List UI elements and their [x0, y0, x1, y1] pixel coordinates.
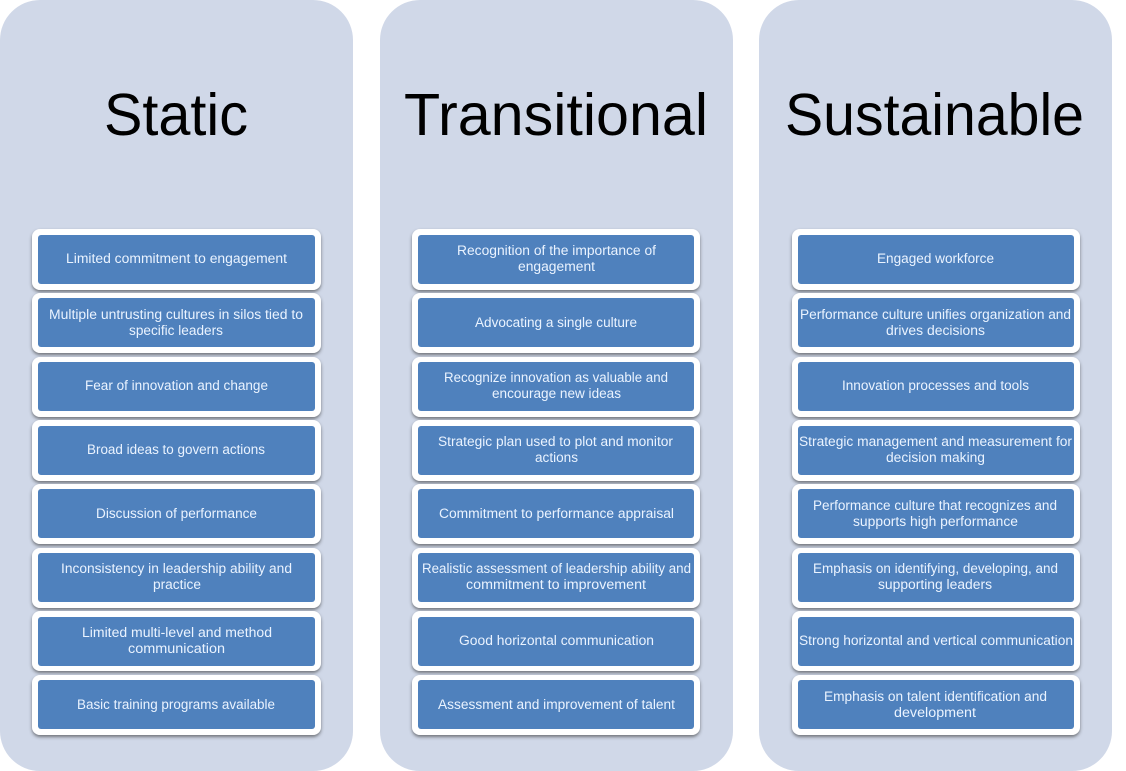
- item: Emphasis on talent: development: [894, 705, 976, 720]
- item: Recognition of engagement: [412, 229, 700, 290]
- item: Strategic management: [792, 420, 1080, 481]
- item: Good horizontal communication: [412, 611, 700, 671]
- item: Commitment to performance appraisal: [412, 484, 700, 544]
- heading: Static: Static: [104, 82, 248, 148]
- item: Realistic assessment: commitment to improvement: [466, 577, 646, 592]
- item: Basic training programs available: [32, 675, 321, 735]
- item: Discussion of performance: [32, 484, 321, 544]
- item: Broad ideas to govern actions: [32, 420, 321, 481]
- item: Recognize innovation: encourage new ideas: [492, 386, 621, 401]
- panel: Static: [0, 0, 353, 771]
- item: Limited multi-level communication: communication: [128, 641, 225, 656]
- item: Performance culture recognizes: supports high performance: [853, 514, 1018, 529]
- item: Limited multi-level communication: [32, 611, 321, 671]
- item: Inconsistency in leadership: Inconsistency in leadership ability and: [61, 561, 292, 576]
- item: Limited commitment to engagement: Limited commitment to engagement: [66, 251, 287, 266]
- item: Recognition of engagement: engagement: [518, 259, 595, 274]
- item: Strong communication: [792, 611, 1080, 671]
- item: Fear of innovation and change: Fear of innovation and change: [85, 378, 268, 393]
- heading: Transitional: Transitional: [404, 82, 708, 148]
- item: Innovation processes and tools: Innovation processes and tools: [842, 378, 1029, 393]
- item: Engaged workforce: Engaged workforce: [877, 251, 994, 266]
- item: Recognize innovation: Recognize innovation as valuable and: [444, 370, 668, 385]
- item: Assessment and improvement of talent: Assessment and improvement of talent: [438, 697, 675, 712]
- item: Discussion of performance: Discussion of performance: [96, 506, 257, 521]
- item: Emphasis on leaders: Emphasis on identifying, developing, and: [813, 561, 1058, 576]
- item: Performance culture unifies: drives decisions: [886, 323, 985, 338]
- item: Performance culture unifies: [792, 293, 1080, 353]
- item: Strategic plan: [412, 420, 700, 481]
- item: Inconsistency in leadership: practice: [153, 577, 201, 592]
- item: Performance culture recognizes: Performance culture that recognizes and: [813, 498, 1057, 513]
- item: Assessment and improvement of talent: [412, 675, 700, 735]
- item: Fear of innovation and change: [32, 357, 321, 417]
- item: Strong communication: Strong horizontal and vertical communication: [799, 633, 1073, 648]
- item: Advocating a single culture: Advocating a single culture: [475, 315, 637, 330]
- heading: Sustainable: Sustainable: [785, 82, 1084, 148]
- item: Strategic plan: actions: [535, 450, 578, 465]
- item: Recognize innovation: [412, 357, 700, 417]
- item: Broad ideas to govern actions: Broad ideas to govern actions: [87, 442, 265, 457]
- item: Realistic assessment: Realistic assessment of leadership ability and: [422, 561, 691, 576]
- item: Emphasis on talent: Emphasis on talent identification and: [824, 689, 1047, 704]
- item: Performance culture recognizes: [792, 484, 1080, 544]
- item: Limited multi-level communication: Limited multi-level and method: [82, 625, 272, 640]
- item: Commitment to performance appraisal: Commitment to performance appraisal: [439, 506, 674, 521]
- item: Inconsistency in leadership: [32, 548, 321, 608]
- item: Emphasis on leaders: [792, 548, 1080, 608]
- item: Limited commitment to engagement: [32, 229, 321, 290]
- item: Emphasis on talent: [792, 675, 1080, 735]
- panel: Transitional: [380, 0, 733, 771]
- item: Performance culture unifies: Performance culture unifies organization and: [800, 307, 1071, 322]
- panel: Sustainable: [759, 0, 1112, 771]
- item: Multiple untrusting cultures: [32, 293, 321, 353]
- item: Innovation processes and tools: [792, 357, 1080, 417]
- item: Strategic management: decision making: [886, 450, 985, 465]
- item: Advocating a single culture: [412, 293, 700, 353]
- item: Strategic management: Strategic management and measurement for: [799, 434, 1073, 449]
- item: Basic training programs available: Basic training programs available: [77, 697, 275, 712]
- item: Strategic plan: Strategic plan used to plot and monitor: [438, 434, 673, 449]
- item: Multiple untrusting cultures: Multiple untrusting cultures in silos tied to: [49, 307, 303, 322]
- item: Recognition of engagement: Recognition of the importance of: [457, 243, 656, 258]
- item: Emphasis on leaders: supporting leaders: [878, 577, 992, 592]
- item: Engaged workforce: [792, 229, 1080, 290]
- item: Multiple untrusting cultures: specific leaders: [129, 323, 223, 338]
- item: Realistic assessment: [412, 548, 700, 608]
- item: Good horizontal communication: Good horizontal communication: [459, 633, 654, 648]
